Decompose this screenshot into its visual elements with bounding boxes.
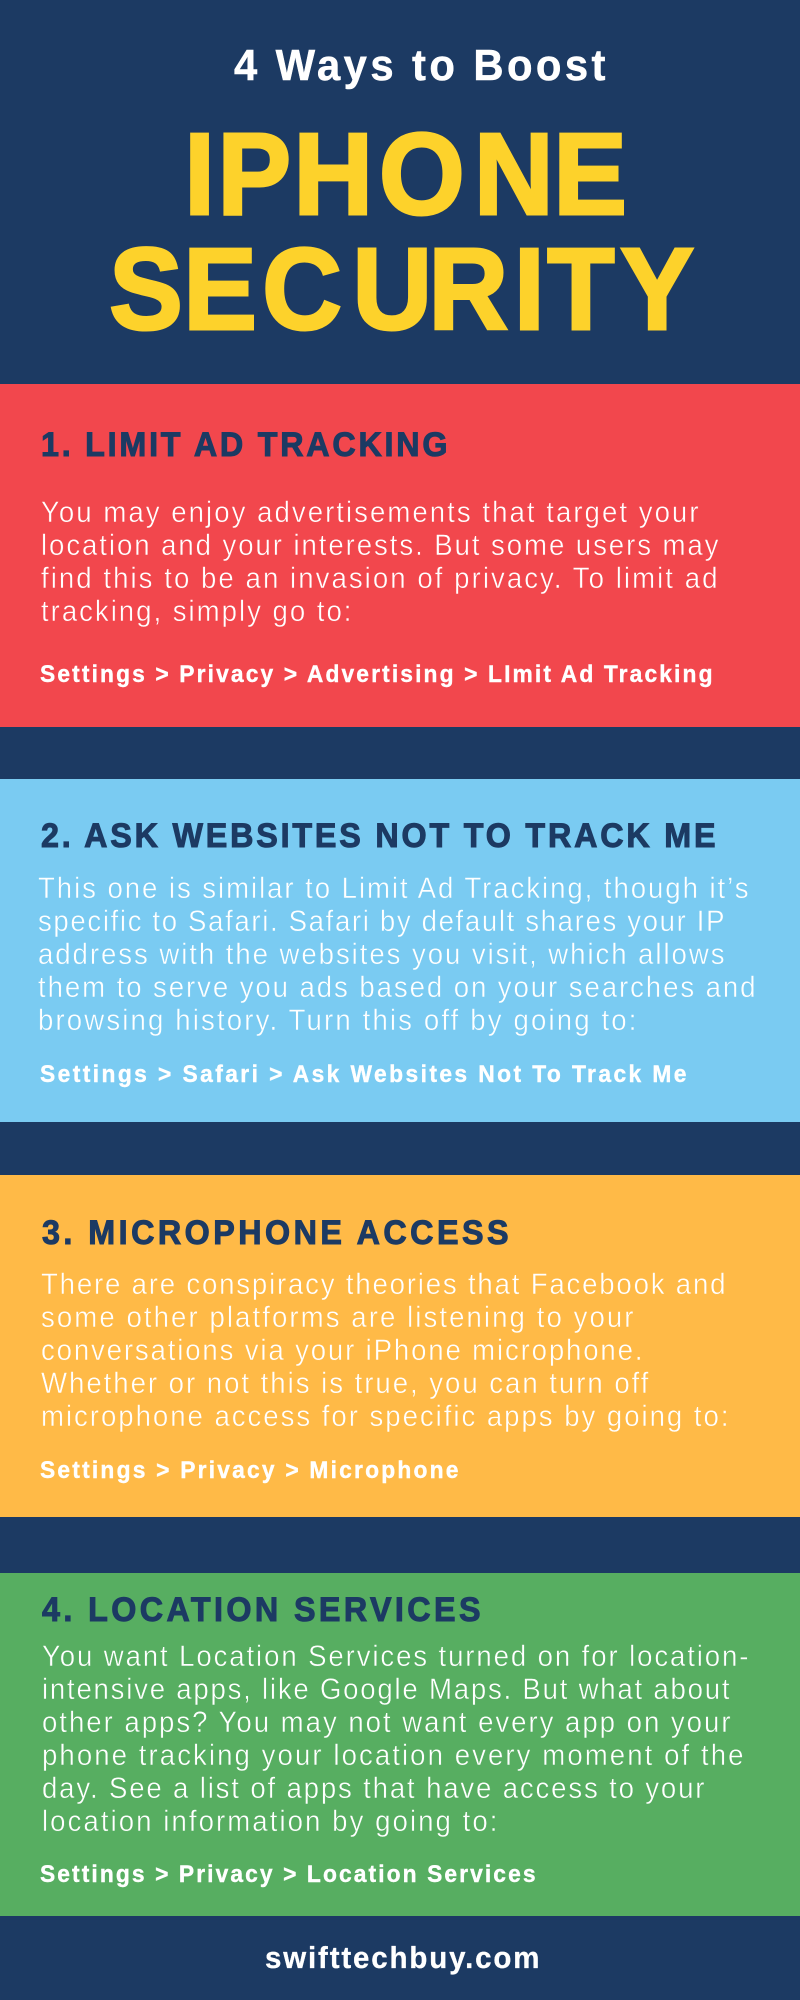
heading 2: 2. ASK WEBSITES NOT TO TRACK ME: [41, 817, 716, 855]
body text 2: This one is similar to Limit Ad Tracking, though it’s: [38, 872, 749, 905]
heading 3: 3. MICROPHONE ACCESS: [42, 1214, 509, 1252]
body text 2: address with the websites you visit, which allows: [38, 938, 725, 971]
settings path 2: Settings > Safari > Ask Websites Not To Track Me: [40, 1060, 686, 1087]
body text 4: phone tracking your location every moment of the: [42, 1739, 743, 1772]
body text 1: tracking, simply go to:: [41, 595, 352, 628]
panel: 2 ask websites not to track me: [0, 779, 800, 1122]
body text 4: You want Location Services turned on for location-: [42, 1640, 748, 1673]
body text 4: day. See a list of apps that have access to your: [42, 1772, 705, 1805]
panel: 4 location services: [0, 1573, 800, 1916]
settings path 3: Settings > Privacy > Microphone: [40, 1456, 458, 1483]
panel: 3 microphone access: [0, 1175, 800, 1517]
body text 3: microphone access for specific apps by going to:: [41, 1400, 729, 1433]
body text 1: You may enjoy advertisements that target your: [41, 496, 699, 529]
settings path 4: Settings > Privacy > Location Services: [40, 1860, 536, 1887]
body text 1: find this to be an invasion of privacy. To limit ad: [41, 562, 717, 595]
title line: security: SECURITY: [109, 224, 694, 354]
body text 3: some other platforms are listening to your: [41, 1301, 634, 1334]
body text 3: [41, 1268, 729, 1433]
heading 1: 1. LIMIT AD TRACKING: [41, 426, 448, 464]
body text 3: conversations via your iPhone microphone.: [41, 1334, 642, 1367]
body text 4: other apps? You may not want every app on your: [42, 1706, 731, 1739]
footer website: swifttechbuy.com: [265, 1941, 539, 1975]
settings path 1: Settings > Privacy > Advertising > LImit Ad Tracking: [40, 660, 713, 687]
header: [109, 41, 694, 354]
body text 3: There are conspiracy theories that Facebook and: [41, 1268, 725, 1301]
panel: 1 limit ad tracking: [0, 384, 800, 727]
body text 2: specific to Safari. Safari by default shares your IP: [38, 905, 725, 938]
body text 4: [42, 1640, 748, 1838]
subtitle: 4 Ways to Boost: [234, 41, 605, 90]
body text 1: location and your interests. But some users may: [41, 529, 719, 562]
body text 4: location information by going to:: [42, 1805, 497, 1838]
body text 1: [41, 496, 719, 628]
body text 4: intensive apps, like Google Maps. But what about: [42, 1673, 730, 1706]
body text 2: [38, 872, 756, 1037]
body text 3: Whether or not this is true, you can turn off: [41, 1367, 649, 1400]
body text 2: browsing history. Turn this off by going to:: [38, 1004, 636, 1037]
body text 2: them to serve you ads based on your searches and: [38, 971, 756, 1004]
heading 4: 4. LOCATION SERVICES: [42, 1591, 481, 1629]
title line: iPhone: IPHONE: [184, 109, 627, 239]
